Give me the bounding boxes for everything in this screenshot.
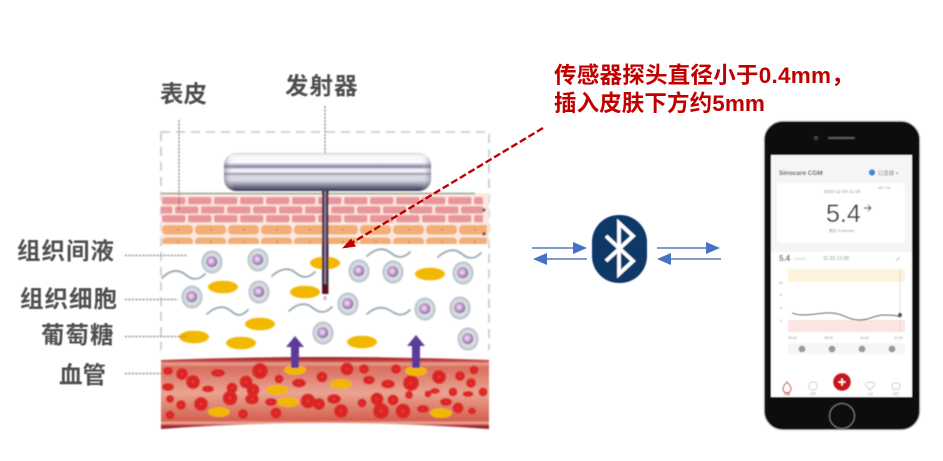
bottom navigation: 我的 (893, 391, 899, 396)
glucose chart: 00:00 (788, 336, 797, 340)
callout text: 插入皮肤下方约5mm (554, 90, 765, 116)
app header: Sinocare CGM (779, 170, 823, 177)
chart header (779, 254, 900, 263)
leader lines (125, 106, 325, 374)
label: transmitter: 发射器 (285, 73, 358, 99)
callout text (554, 62, 854, 116)
label: blood vessel: 血管 (59, 362, 106, 388)
glucose chart: 8 (780, 293, 782, 297)
wavy interstitial lines (162, 249, 481, 315)
right bidirectional arrows (657, 242, 721, 265)
upward purple arrows (286, 335, 425, 368)
transmitter (224, 153, 431, 191)
chart controls (788, 343, 905, 354)
dashed boundary of diagram (161, 132, 489, 350)
bottom navigation: 血糖 (784, 391, 791, 396)
illustration: skin cross-section with sensor (125, 106, 489, 429)
label: epidermis: 表皮 (160, 81, 207, 107)
app header (779, 169, 899, 177)
callout text: 传感器探头直径小于0.4mm， (554, 62, 854, 88)
sensor needle (322, 189, 328, 300)
glucose chart: 05:00 (824, 336, 833, 340)
red dashed callout arrow (342, 128, 543, 248)
left bidirectional arrows (532, 242, 587, 265)
glucose chart: 4 (780, 306, 782, 310)
glucose molecules (179, 257, 445, 349)
diagram labels (17, 73, 358, 388)
glucose reading card: 5.4 (826, 200, 861, 228)
bottom navigation: 趋势 (810, 391, 817, 396)
bottom navigation: 记录 (867, 391, 874, 396)
glucose reading card (777, 183, 905, 243)
glucose chart (779, 269, 905, 340)
phone (764, 121, 920, 430)
tissue cells (182, 248, 478, 350)
chart header: mmol/L (794, 256, 808, 261)
home button (830, 404, 854, 428)
skin layer (161, 193, 489, 244)
glucose chart: 10:00 (860, 336, 869, 340)
glucose reading card: 2020-11-03 11:00 (823, 189, 861, 195)
label: interstitial fluid: 组织间液 (17, 238, 115, 264)
glucose chart: 11:00 (894, 336, 903, 340)
glucose chart: 2 (780, 319, 782, 323)
phone screen (771, 155, 912, 397)
glucose reading card: 参比 5.4mmol/L (829, 228, 855, 233)
icon: bluetooth (592, 215, 647, 283)
chart header: 5.4 (779, 254, 791, 263)
bottom navigation (783, 373, 900, 396)
label: tissue cells: 组织细胞 (20, 286, 118, 312)
glucose reading card: 487 ms (878, 186, 891, 190)
phone body (764, 121, 920, 430)
blood vessel (161, 357, 489, 429)
chart header: 11-03 11:00 (823, 256, 849, 262)
glucose chart: 11 (779, 281, 783, 285)
label: glucose: 葡萄糖 (41, 322, 114, 348)
app header: 已连接 × (878, 169, 899, 177)
